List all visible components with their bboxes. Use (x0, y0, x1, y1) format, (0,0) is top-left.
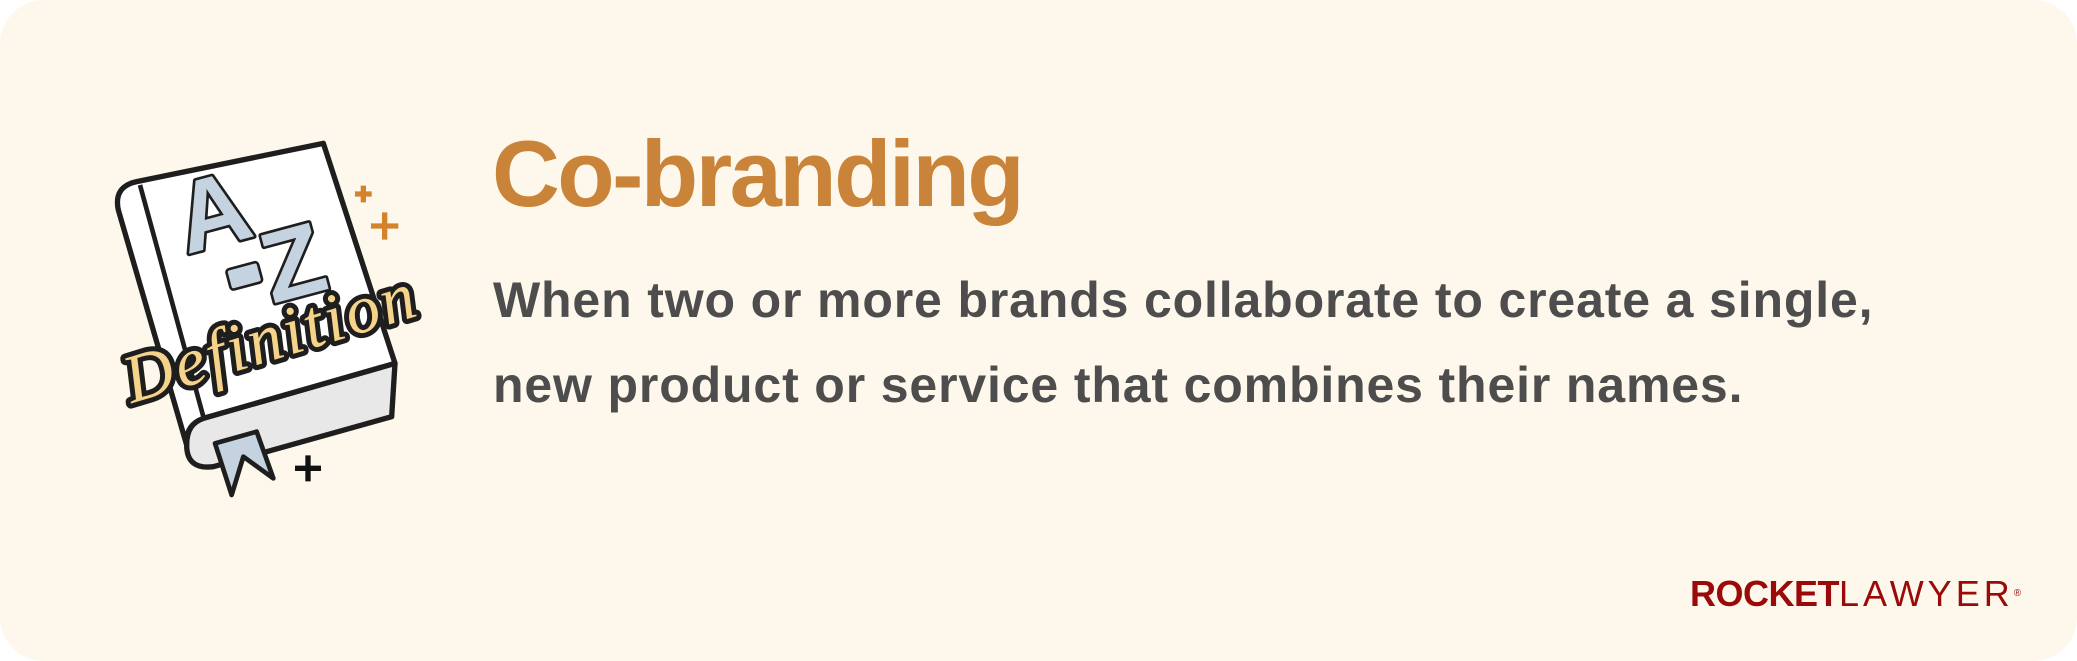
bookmark (215, 432, 273, 495)
letters A - Z (163, 133, 337, 343)
definition script label: Definition (113, 256, 427, 418)
logo: ROCKETLAWYER® (1690, 573, 2021, 614)
letters A - Z: A (163, 149, 262, 275)
letters A - Z: Z (249, 201, 337, 325)
sparkle plus signs (295, 186, 398, 481)
book cover (117, 143, 395, 445)
definition text: new product or service that combines their names. (493, 357, 1743, 413)
definition text (493, 272, 1873, 413)
book pages block (187, 363, 395, 467)
title: Co-branding (492, 121, 1022, 226)
definition text: When two or more brands collaborate to create a single, (493, 272, 1873, 328)
icon: definition book (113, 140, 427, 498)
